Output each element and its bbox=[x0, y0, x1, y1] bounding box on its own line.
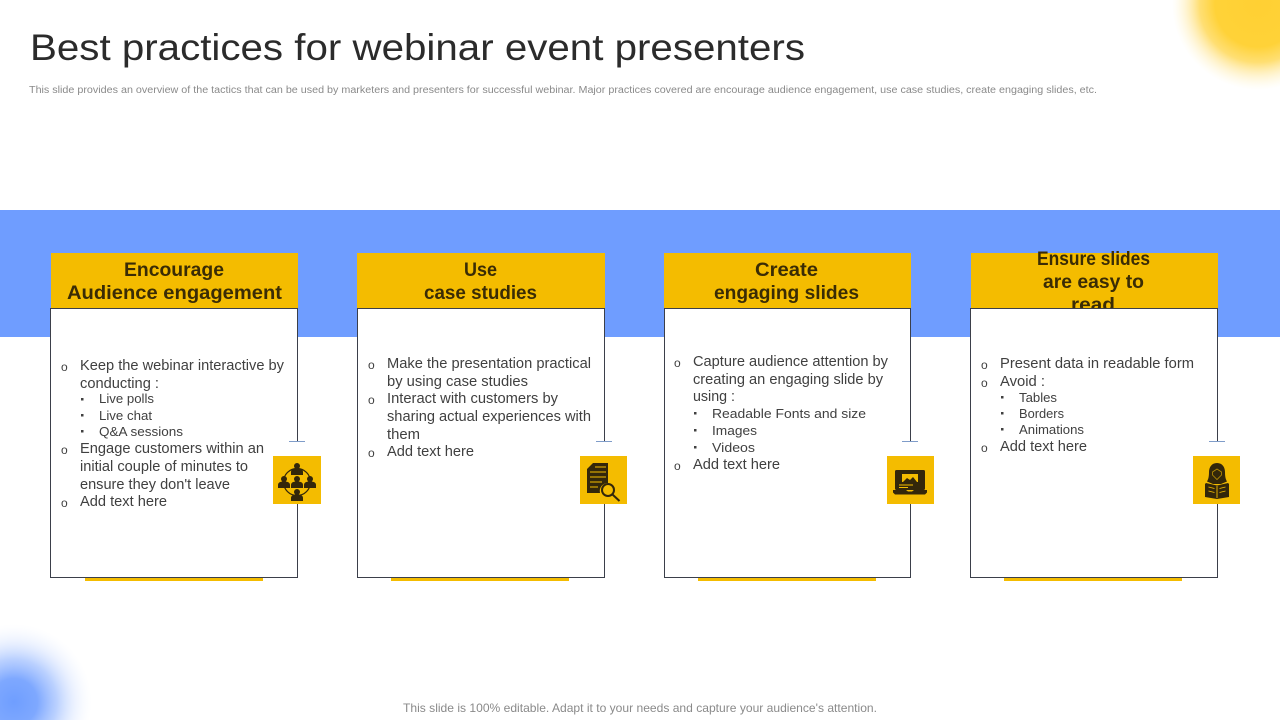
panel: ensure slides are easy to read bbox=[970, 249, 1240, 581]
heading bar: Encourage bbox=[124, 260, 224, 281]
content box bbox=[50, 308, 298, 578]
bullet list bbox=[368, 356, 591, 460]
bullet list: o bbox=[61, 496, 68, 510]
bullet list: Capture audience attention by bbox=[693, 354, 889, 370]
bullet list bbox=[61, 358, 285, 510]
panel base accent bbox=[391, 574, 569, 581]
content box bbox=[970, 308, 1218, 578]
bullet list: Images bbox=[712, 424, 757, 438]
panel: encourage audience engagement bbox=[50, 253, 321, 581]
connector tick bbox=[902, 441, 918, 456]
heading bar bbox=[971, 251, 1218, 308]
icon: laptop bbox=[887, 456, 934, 504]
panel: create engaging slides bbox=[664, 253, 934, 581]
bullet list: Add text here bbox=[80, 494, 167, 510]
icon: people network bbox=[273, 456, 321, 504]
icon: document with magnifier bbox=[580, 456, 627, 504]
title: Best practices for webinar event presenters bbox=[30, 27, 805, 68]
bullet list: o bbox=[981, 376, 988, 390]
bullet list: o bbox=[674, 356, 681, 370]
bullet list: initial couple of minutes to bbox=[80, 459, 248, 475]
heading bar bbox=[664, 253, 911, 308]
bullet list: Add text here bbox=[1000, 439, 1087, 455]
heading bar: read bbox=[1071, 295, 1115, 316]
content box bbox=[358, 308, 604, 578]
bullet list bbox=[674, 354, 889, 473]
bullet list: o bbox=[368, 358, 375, 372]
bullet list: using : bbox=[693, 389, 735, 405]
bullet list: Animations bbox=[1019, 423, 1084, 437]
content box bbox=[664, 308, 910, 578]
heading bar: Create bbox=[755, 260, 818, 281]
panel: use case studies bbox=[357, 253, 627, 581]
heading bar: Audience engagement bbox=[67, 283, 283, 304]
bullet list: Avoid : bbox=[1000, 374, 1045, 390]
heading bar: are easy to bbox=[1043, 272, 1144, 293]
heading bar: Use bbox=[464, 260, 497, 281]
heading bar bbox=[357, 253, 605, 308]
bullet list: them bbox=[387, 427, 420, 443]
connector tick bbox=[289, 441, 305, 456]
heading bar: case studies bbox=[424, 283, 537, 304]
bullet list: creating an engaging slide by bbox=[693, 372, 884, 388]
bullet list: ensure they don't leave bbox=[80, 477, 230, 493]
bullet list: o bbox=[368, 393, 375, 407]
bullet list bbox=[981, 356, 1194, 455]
bullet list: Borders bbox=[1019, 407, 1064, 421]
bullet list: o bbox=[61, 360, 68, 374]
bullet list: Present data in readable form bbox=[1000, 356, 1194, 372]
bullet list: by using case studies bbox=[387, 374, 528, 390]
bullet list: o bbox=[981, 441, 988, 455]
connector tick bbox=[1209, 441, 1225, 456]
bullet list: Interact with customers by bbox=[387, 391, 559, 407]
bullet list: Engage customers within an bbox=[80, 441, 264, 457]
heading bar: engaging slides bbox=[714, 283, 859, 304]
bullet list: Add text here bbox=[693, 457, 780, 473]
bullet list: Readable Fonts and size bbox=[712, 407, 866, 421]
subtitle description: This slide provides an overview of the tactics that can be used by marketers and presenters for successful webinar. Major practices covered are encourage audience engagement, use case studies, create engaging slides, etc. bbox=[29, 85, 1097, 96]
footer note: This slide is 100% editable. Adapt it to your needs and capture your audience's attention. bbox=[403, 701, 877, 715]
bullet list: o bbox=[368, 446, 375, 460]
bullet list: Live polls bbox=[99, 392, 154, 406]
heading bar: Ensure slides bbox=[1037, 249, 1150, 270]
decorative glow: blue corner bbox=[0, 622, 94, 720]
bullet list: o bbox=[674, 459, 681, 473]
decorative glow: yellow corner bbox=[1170, 0, 1280, 92]
icon: person reading bbox=[1193, 456, 1240, 504]
bullet list: Tables bbox=[1019, 391, 1057, 405]
connector tick bbox=[596, 441, 612, 456]
bullet list: conducting : bbox=[80, 376, 159, 392]
bullet list: Live chat bbox=[99, 409, 153, 423]
panel base accent bbox=[698, 574, 876, 581]
panel base accent bbox=[85, 574, 263, 581]
bullet list: Videos bbox=[712, 441, 755, 455]
bullet list: o bbox=[61, 443, 68, 457]
bullet list: sharing actual experiences with bbox=[387, 409, 591, 425]
heading bar bbox=[51, 253, 298, 308]
bullet list: Add text here bbox=[387, 444, 474, 460]
blue background band bbox=[0, 210, 1280, 337]
bullet list: Keep the webinar interactive by bbox=[80, 358, 285, 374]
bullet list: o bbox=[981, 358, 988, 372]
bullet list: Q&A sessions bbox=[99, 425, 183, 439]
panel base accent bbox=[1004, 574, 1182, 581]
bullet list: Make the presentation practical bbox=[387, 356, 591, 372]
